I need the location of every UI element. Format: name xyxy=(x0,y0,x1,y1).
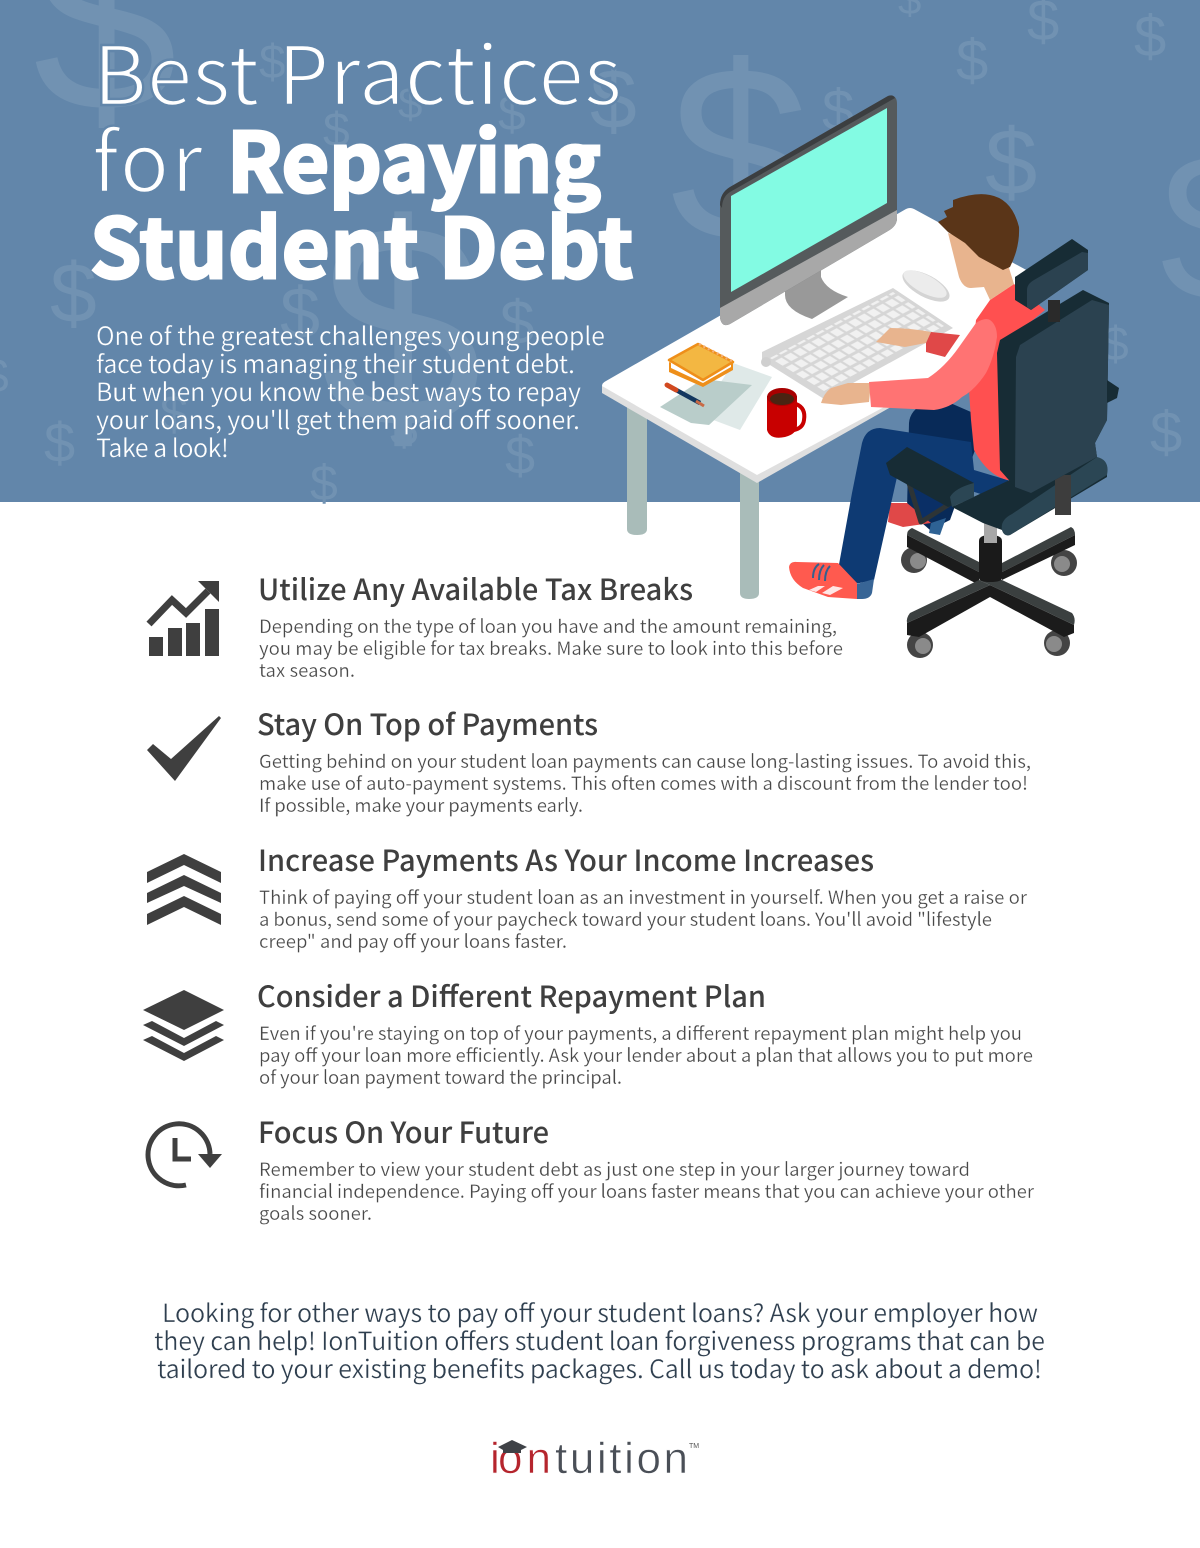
icon: graduation cap xyxy=(498,1440,527,1453)
pen xyxy=(667,385,704,406)
body text: make use of auto-payment systems. This often comes with a discount from the lender too! xyxy=(259,770,1028,796)
background dollar sign pattern: $ xyxy=(1150,400,1182,465)
background dollar sign pattern: $ xyxy=(398,79,422,128)
body text xyxy=(259,884,1028,954)
logo: iontuition: TM xyxy=(689,1443,699,1450)
body text: creep" and pay off your loans faster. xyxy=(259,928,567,954)
monitor xyxy=(720,95,897,325)
heading: Increase Payments As Your Income Increases xyxy=(258,838,874,880)
chair back xyxy=(997,290,1119,493)
title: for xyxy=(92,97,203,216)
tip 4: repayment plan xyxy=(143,974,1033,1090)
background dollar sign pattern: $ xyxy=(44,411,75,474)
title: Student Debt xyxy=(90,183,633,302)
title xyxy=(90,10,633,302)
background dollar sign pattern: $ xyxy=(50,246,97,340)
background dollar sign pattern: $ xyxy=(822,78,854,143)
body text: tax season. xyxy=(259,657,355,683)
near leg and trousers xyxy=(838,428,1024,584)
call to action: they can help! IonTuition offers student loan forgiveness programs that can be xyxy=(154,1322,1045,1358)
body text: Remember to view your student debt as just one step in your larger journey toward xyxy=(259,1156,970,1182)
body text xyxy=(259,1156,1035,1226)
background dollar sign pattern: $ xyxy=(985,109,1037,214)
background dollar sign pattern: $ xyxy=(390,400,418,456)
body text: goals sooner. xyxy=(259,1200,372,1226)
title: Repaying xyxy=(227,97,601,216)
heading: Stay On Top of Payments xyxy=(257,702,598,744)
logo: iontuition xyxy=(490,1434,699,1483)
body text: Getting behind on your student loan payments can cause long-lasting issues. To avoid this, xyxy=(259,748,1031,774)
body text: If possible, make your payments early. xyxy=(259,792,583,818)
chair base xyxy=(901,523,1077,658)
background dollar sign pattern: $ xyxy=(1134,4,1166,69)
background dollar sign pattern xyxy=(0,0,1200,511)
torso xyxy=(969,284,1045,481)
tip 2: payments xyxy=(147,702,1031,818)
desk legs xyxy=(627,395,759,599)
icon: upward chevrons xyxy=(147,854,221,925)
background dollar sign pattern: $ xyxy=(498,85,526,141)
body text: Think of paying off your student loan as an investment in yourself. When you get a raise or xyxy=(259,884,1028,910)
illustration: person at desk xyxy=(602,95,1119,658)
tip 5: future xyxy=(148,1110,1035,1226)
chair seat xyxy=(952,457,1108,535)
heading: Consider a Different Repayment Plan xyxy=(257,974,766,1016)
call to action xyxy=(154,1294,1045,1386)
call to action: tailored to your existing benefits packages. Call us today to ask about a demo! xyxy=(157,1350,1042,1386)
background dollar sign pattern: $ xyxy=(956,28,988,93)
logo: iontuition: i xyxy=(490,1434,500,1483)
icon: layers xyxy=(143,990,224,1061)
body text: of your loan payment toward the principal. xyxy=(259,1064,622,1090)
base column xyxy=(979,535,1002,582)
mouse xyxy=(898,264,954,308)
body text xyxy=(259,748,1031,818)
intro paragraph: But when you know the best ways to repay xyxy=(96,373,581,409)
intro paragraph: Take a look! xyxy=(96,429,229,465)
notebook xyxy=(669,344,733,387)
intro paragraph xyxy=(96,317,605,465)
body text: Even if you're staying on top of your payments, a different repayment plan might help you xyxy=(259,1020,1022,1046)
body text: pay off your loan more efficiently. Ask your lender about a plan that allows you to put more xyxy=(259,1042,1033,1068)
background dollar sign pattern: $ xyxy=(321,164,482,488)
tip 1: tax breaks xyxy=(149,567,843,683)
near shoe xyxy=(789,562,874,599)
upper base arms xyxy=(907,527,1075,585)
background dollar sign pattern: $ xyxy=(160,385,188,441)
heading: Focus On Your Future xyxy=(258,1110,549,1152)
intro paragraph: face today is managing their student debt. xyxy=(96,345,575,381)
head xyxy=(938,194,1019,300)
background dollar sign pattern: $ xyxy=(1102,318,1129,371)
heading: Utilize Any Available Tax Breaks xyxy=(258,567,693,609)
icon: check mark xyxy=(147,716,221,781)
intro paragraph: One of the greatest challenges young people xyxy=(96,317,605,353)
icon: rising chart xyxy=(149,581,219,656)
lower base arms xyxy=(907,580,1075,637)
icon: clock with arrow xyxy=(148,1124,222,1186)
intro paragraph: your loans, you'll get them paid off sooner. xyxy=(96,401,580,437)
background dollar sign pattern: $ xyxy=(670,14,809,293)
coffee mug xyxy=(767,388,804,438)
papers xyxy=(660,363,772,430)
far sleeve and hand xyxy=(876,328,960,357)
call to action: Looking for other ways to pay off your student loans? Ask your employer how xyxy=(162,1294,1038,1330)
background dollar sign pattern: $ xyxy=(505,426,535,486)
desk top xyxy=(602,208,1030,483)
near arm and hand xyxy=(821,319,997,410)
far leg and shoe xyxy=(888,402,975,535)
logo: iontuition: on xyxy=(498,1434,551,1483)
headrest xyxy=(1015,239,1088,310)
logo: iontuition: tuition xyxy=(555,1434,688,1483)
header background band xyxy=(0,0,1200,511)
background dollar sign pattern: $ xyxy=(259,36,286,89)
keyboard xyxy=(761,288,953,399)
body text: Depending on the type of loan you have and the amount remaining, xyxy=(259,613,837,639)
title: Best Practices xyxy=(93,10,622,129)
background dollar sign pattern: $ xyxy=(590,52,637,146)
body text xyxy=(259,613,843,683)
tip 3: income xyxy=(147,838,1028,954)
body text: a bonus, send some of your paycheck toward your student loans. You'll avoid "lifestyle xyxy=(259,906,992,932)
wheels xyxy=(901,547,1077,658)
background dollar sign pattern: $ xyxy=(323,104,350,157)
background dollar sign pattern: $ xyxy=(310,455,338,511)
body text xyxy=(259,1020,1033,1090)
chair armrest xyxy=(886,447,974,522)
background dollar sign pattern: $ xyxy=(500,289,534,358)
background dollar sign pattern: $ xyxy=(280,274,320,354)
body text: financial independence. Paying off your loans faster means that you can achieve your other xyxy=(259,1178,1035,1204)
body text: you may be eligible for tax breaks. Make sure to look into this before xyxy=(259,635,843,661)
